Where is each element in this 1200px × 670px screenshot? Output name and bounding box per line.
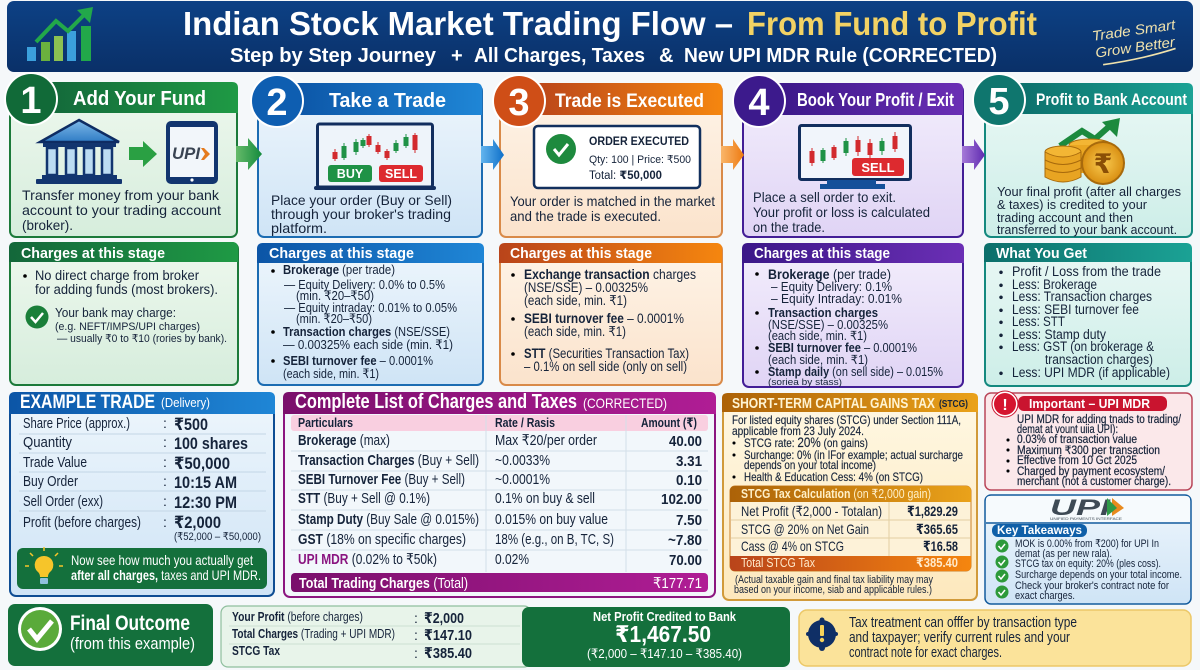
panel: profit summary — [221, 606, 531, 667]
step number 3: 3 — [508, 82, 530, 124]
heading: short-term capital gains tax: SHORT-TERM CAPITAL GAINS TAX — [732, 395, 935, 412]
panel: charges stage 2 — [257, 243, 484, 385]
text: step 4 description: Place a sell order to exit. — [753, 189, 896, 205]
text: stcg rules: For listed equity shares (STCG) under Section 111A, — [732, 413, 961, 427]
table: charges: 0.10 — [676, 472, 702, 489]
list: what you get — [999, 264, 1170, 380]
panel: net profit credited to bank — [522, 607, 790, 667]
panel: important upi mdr — [985, 391, 1192, 490]
arrow: step 4 to step 5 — [962, 139, 985, 170]
table: example trade rows: : — [163, 514, 167, 530]
text: stcg rules: depends on your total income) — [744, 458, 876, 472]
table: example trade rows: Share Price (approx.) — [23, 415, 130, 432]
list: stage 4 charges: – Equity Intraday: 0.01% — [771, 292, 902, 306]
icon: upi logo: UNIFIED PAYMENTS INTERFACE — [1050, 516, 1122, 521]
table: charges: ~0.0033% — [495, 452, 550, 469]
table: charges: UPI MDR (0.02% to ₹50k) — [298, 551, 437, 568]
icon: bank — [36, 120, 122, 184]
subtitle: New UPI MDR Rule (CORRECTED) — [684, 45, 997, 67]
heading: charges at this stage: Charges at this stage — [21, 245, 165, 262]
icon: upi logo: UPI — [1050, 495, 1111, 520]
text: stcg rules: Surchange: 0% (in IFor example; actual surcharge — [744, 448, 963, 462]
icon: coins and rising arrow: ₹ — [1094, 149, 1112, 179]
note: actual taxable gain — [734, 574, 933, 596]
panel: profit summary: : — [414, 610, 418, 626]
list: stage 2 charges: — Equity Delivery: 0.0% to 0.5% — [284, 277, 445, 292]
icon: trading monitor with buy and sell — [314, 124, 436, 190]
icon: exclamation: ! — [1002, 397, 1008, 414]
panel: profit summary: ₹2,000 — [424, 610, 464, 627]
subtitle: & — [659, 45, 673, 67]
panel: profit summary: ₹147.10 — [424, 627, 472, 644]
table: stcg tax calculation: ₹1,829.29 — [907, 503, 958, 519]
table: stcg tax calculation: STCG @ 20% on Net Gain — [741, 521, 869, 537]
table: example trade rows: 10:15 AM — [174, 473, 237, 492]
icons: green check marks — [996, 540, 1008, 598]
panel: final outcome — [8, 604, 213, 666]
panel: profit summary: STCG Tax — [232, 643, 281, 658]
panel: step 2 take a trade — [250, 74, 482, 237]
table: example trade rows: : — [163, 415, 167, 431]
table: stcg tax calculation: Cass @ 4% on STCG — [741, 538, 844, 554]
table: example trade rows: (₹52,000 – ₹50,000) — [174, 531, 261, 543]
panel: net profit credited to bank: ₹1,467.50 — [615, 621, 711, 647]
panel: charges stage 1 — [9, 242, 238, 385]
text: step 3 description: and the trade is executed. — [510, 208, 661, 224]
panel: step 5 profit to bank — [972, 73, 1193, 237]
text: step 3 description: Your order is matched in the market — [510, 193, 715, 209]
text: upi mdr rules — [1006, 414, 1182, 488]
list: stage 2 charges: Brokerage (per trade) — [283, 262, 395, 277]
subheading: from this example: (from this example) — [70, 634, 195, 653]
list: stage 2 charges: (min. ₹20–₹50) — [296, 288, 374, 303]
list: what you get: Less: UPI MDR (if applicable) — [1012, 365, 1170, 380]
table: charges: Transaction Charges (Buy + Sell) — [298, 452, 479, 469]
icon: tablet with UPI: UPI — [172, 144, 201, 163]
icon: exclamation — [992, 391, 1018, 417]
text: tax treatment note: contract note for exact charges. — [849, 644, 1002, 661]
icon: check — [26, 306, 48, 328]
table: charges: 0.02% — [495, 551, 529, 568]
list: stage 4 charges: (soriea by stass) — [768, 377, 842, 387]
table: charges: SEBI Turnover Fee (Buy + Sell) — [298, 471, 465, 488]
text: step 1 description: account to your trading account — [22, 202, 221, 218]
list: stage 2 charges: SEBI turnover fee – 0.0001% — [283, 353, 433, 368]
heading: complete list: Complete List of Charges and Taxes — [295, 391, 577, 413]
text: stcg rules: Health & Education Cess: 4% (on STCG) — [744, 470, 923, 484]
note: bank may charge: Your bank may charge: — [55, 306, 176, 320]
icon: light bulb — [25, 547, 63, 584]
table: example trade rows: Sell Order (exx) — [23, 493, 103, 510]
table: example trade rows: : — [163, 473, 167, 489]
icon: green check — [546, 134, 576, 164]
heading: take a trade: Take a Trade — [329, 90, 446, 112]
text: upi mdr rules: Charged by payment ecosystem/ — [1017, 466, 1166, 478]
step number 2 — [250, 74, 304, 128]
list: what you get: Profit / Loss from the trade — [1012, 264, 1161, 279]
list: stage 1 charges: for adding funds (most brokers). — [35, 282, 218, 297]
table: charges: GST (18% on specific charges) — [298, 531, 466, 548]
table: example trade rows: ₹50,000 — [174, 454, 230, 473]
list: stage 4 charges: Brokerage (per trade) — [768, 267, 891, 282]
panel: step 3 trade is executed — [492, 74, 722, 237]
panel: net profit credited to bank: (₹2,000 – ₹147.10 – ₹385.40) — [587, 646, 742, 661]
list: stage 3 charges: – 0.1% on sell side (only on sell) — [524, 359, 687, 374]
panel: profit summary: ₹385.40 — [424, 645, 472, 662]
heading: trade is executed: Trade is Executed — [555, 91, 704, 112]
table: charges: 3.31 — [676, 453, 702, 470]
callout: now see how much — [17, 547, 267, 589]
table: charges: Particulars — [298, 415, 353, 430]
text: step 5 description — [997, 184, 1181, 237]
step number 1 — [4, 72, 58, 126]
text: step 5 description: & taxes) is credited to your — [997, 197, 1148, 212]
table: charges: STT (Buy + Sell @ 0.1%) — [298, 490, 430, 507]
text: tax treatment note: Tax treatment can offfer by transaction type — [849, 614, 1077, 631]
title: From Fund to Profit — [747, 5, 1037, 42]
icon: green arrow — [129, 141, 157, 167]
list: key takeaways: STCG tax on equity: 20% (ples coss). — [1015, 558, 1161, 570]
table: example trade rows: : — [163, 493, 167, 509]
total row: Total Trading Charges (Total) — [299, 575, 468, 592]
total row — [291, 573, 708, 592]
panel: tax treatment note — [799, 610, 1191, 666]
step number 5: 5 — [988, 81, 1010, 123]
arrow: step 1 to step 2 — [236, 138, 262, 170]
card: order executed — [534, 126, 700, 188]
list: stage 4 charges: (each side, min. ₹1) — [768, 329, 867, 343]
list: stage 2 charges: — 0.00325% each side (min. ₹1) — [283, 337, 453, 352]
list: key takeaways: Check your broker's contract note for — [1015, 580, 1169, 592]
list: what you get: Less: Brokerage — [1012, 277, 1097, 292]
list: stage 3 charges: STT (Securities Transaction Tax) — [524, 346, 689, 361]
text: step 4 description: on the trade. — [753, 219, 825, 235]
list: stage 2 charges — [271, 262, 457, 381]
table: example trade rows: ₹500 — [174, 415, 208, 434]
table: example trade rows: : — [163, 434, 167, 450]
total row: ₹177.71 — [653, 575, 702, 592]
icon: warning badge — [806, 618, 838, 651]
list: what you get: Less: SEBI turnover fee — [1012, 302, 1139, 317]
table: charges: Max ₹20/per order — [495, 432, 597, 449]
text: step 3 description — [510, 193, 715, 224]
panel: charges stage 4 — [742, 243, 964, 387]
table: stcg tax calculation: ₹365.65 — [916, 521, 958, 537]
note: actual taxable gain: based on your income, siab and applicable rules.) — [734, 584, 932, 596]
list: stage 3 charges — [511, 267, 696, 374]
list: stage 3 charges: (NSE/SSE) – 0.00325% — [524, 280, 648, 295]
panel: example trade — [9, 392, 275, 596]
panel: net profit credited to bank: Net Profit Credited to Bank — [593, 609, 737, 624]
text: step 2 description — [271, 192, 452, 236]
heading: final outcome: Final Outcome — [70, 612, 190, 635]
title: Indian Stock Market Trading Flow – — [183, 5, 733, 42]
subheading: delivery: (Delivery) — [161, 395, 210, 410]
text: step 5 description: Your final profit (after all charges — [997, 184, 1181, 199]
step number 5 — [972, 73, 1026, 127]
arrow: step 3 to step 4 — [721, 139, 744, 170]
list: stage 4 charges: (each side, min. ₹1) — [768, 353, 868, 367]
text: step 4 description: Your profit or loss is calculated — [753, 204, 930, 220]
icon: large check — [18, 607, 62, 651]
table: stcg tax calculation: Total STCG Tax — [741, 555, 815, 570]
table: example trade rows: Buy Order — [23, 473, 78, 490]
callout: now see how much: after all charges, taxes and UPI MDR. — [71, 567, 261, 583]
table: charges: Stamp Duty (Buy Sale @ 0.015%) — [298, 511, 479, 528]
slogan: Trade Smart Grow Better: Grow Better — [1094, 33, 1177, 61]
title — [183, 5, 1037, 42]
list: stage 4 charges: Stamp daily (on sell side) – 0.015% — [768, 365, 943, 379]
subtitle: Step by Step Journey — [230, 45, 437, 67]
pill heading: important upi mdr: Important – UPI MDR — [1029, 397, 1150, 411]
panel: step 1 add your fund — [4, 72, 238, 237]
table: charges: 0.015% on buy value — [495, 511, 608, 528]
icon: upi logo — [1050, 495, 1124, 521]
step number 4 — [732, 74, 786, 128]
table: stcg tax calculation: Net Profit (₹2,000 - Totalan) — [741, 503, 882, 519]
panel: step 4 book your profit — [732, 74, 963, 237]
text: upi mdr rules: Maximum ₹300 per transaction — [1017, 445, 1160, 457]
list: what you get: Less: Stamp duty — [1012, 327, 1106, 342]
card: order executed: Total: ₹50,000 — [589, 170, 662, 182]
table: example trade rows — [19, 415, 266, 543]
heading: book your profit / exit: Book Your Profit / Exit — [797, 90, 954, 110]
card: order executed: Qty: 100 | Price: ₹500 — [589, 154, 691, 166]
text: upi mdr rules: demat at vount uiia UPI): — [1017, 424, 1118, 436]
list: key takeaways: demat (as per new rala). — [1015, 548, 1112, 560]
table: charges: Amount (₹) — [641, 415, 697, 430]
subheading: corrected: (CORRECTED) — [583, 395, 667, 411]
list: stage 4 charges — [755, 267, 943, 387]
step number 4: 4 — [748, 82, 770, 124]
table: charges: 102.00 — [661, 491, 702, 508]
table: example trade rows: ₹2,000 — [174, 513, 221, 532]
list: what you get: transaction charges) — [1045, 352, 1153, 367]
list: stage 4 charges: – Equity Delivery: 0.1% — [771, 280, 892, 294]
text: upi mdr rules: Effective from 10 Gct 2025 — [1017, 455, 1137, 467]
text: upi mdr rules: merchant (not a customer charge). — [1017, 476, 1171, 488]
heading: example trade: EXAMPLE TRADE — [20, 392, 155, 413]
panel: complete list of charges and taxes — [283, 391, 716, 597]
list: what you get: Less: Transaction charges — [1012, 289, 1152, 304]
heading: charges at this stage: Charges at this stage — [269, 245, 414, 262]
list: stage 1 charges: No direct charge from broker — [35, 268, 199, 283]
step number 1: 1 — [20, 80, 42, 122]
text: tax treatment note — [849, 614, 1077, 661]
table: stcg tax calculation — [730, 486, 971, 571]
icon: monitor with sell — [800, 126, 910, 189]
table: charges: ~7.80 — [668, 532, 702, 549]
table: example trade rows: : — [163, 454, 167, 470]
icon: trading monitor with buy and sell: BUY — [337, 167, 364, 181]
panel: profit summary: Total Charges (Trading + UPI MDR) — [232, 626, 395, 641]
table: stcg tax calculation: ₹385.40 — [916, 555, 958, 570]
list: key takeaways — [1015, 538, 1182, 602]
heading: charges at this stage: Charges at this stage — [754, 245, 890, 262]
subtitle — [230, 45, 997, 67]
table: charges: 70.00 — [669, 552, 702, 569]
text: step 2 description: platform. — [271, 220, 327, 236]
table: stcg tax calculation: STCG Tax Calculation (on ₹2,000 gain) — [741, 487, 931, 501]
text: step 2 description: Place your order (Buy or Sell) — [271, 192, 452, 208]
list: stage 2 charges: Transaction charges (NSE/SSE) — [283, 324, 450, 339]
slogan: Trade Smart Grow Better: Trade Smart — [1091, 16, 1178, 44]
table: example trade rows: Quantity — [23, 434, 72, 451]
icon: coins and rising arrow — [1045, 118, 1124, 184]
text: stcg rules — [732, 413, 963, 484]
list: stage 1 charges — [23, 268, 218, 297]
text: step 1 description: (broker). — [22, 217, 73, 233]
list: key takeaways: exact charges. — [1015, 590, 1075, 602]
icon: monitor with sell: SELL — [861, 160, 895, 175]
list: key takeaways: MOK is 0.00% from ₹200) for UPI In — [1015, 538, 1159, 550]
subheading: stcg: (STCG) — [939, 399, 968, 410]
text: step 1 description: Transfer money from your bank — [22, 187, 220, 203]
heading: what you get: What You Get — [996, 245, 1087, 262]
heading: charges at this stage: Charges at this stage — [510, 245, 652, 262]
text: tax treatment note: and taxpayer; verify current rules and your — [849, 629, 1070, 646]
text: step 5 description: trading account and then — [997, 210, 1133, 225]
list: stage 2 charges: — Equity intraday: 0.01% to 0.05% — [284, 300, 457, 315]
text: stcg rules: applicable from 23 July 2024. — [732, 424, 864, 438]
note: bank may charge: (e.g. NEFT/IMPS/UPI charges) — [55, 321, 200, 333]
card: order executed: ORDER EXECUTED — [589, 134, 689, 148]
heading: add your fund: Add Your Fund — [73, 88, 206, 110]
table: example trade rows: 12:30 PM — [174, 493, 237, 512]
icon: trading monitor with buy and sell: SELL — [385, 167, 417, 181]
list: what you get: Less: GST (on brokerage & — [1012, 339, 1154, 354]
text: step 2 description: through your broker's trading — [271, 206, 451, 222]
list: stage 2 charges: (min. ₹20–₹50) — [296, 311, 372, 326]
subtitle: + — [451, 45, 463, 67]
text: stcg rules: STCG rate: 20% (on gains) — [744, 434, 868, 450]
list: stage 3 charges: SEBI turnover fee – 0.0001% — [524, 311, 684, 326]
panel: upi logo and key takeaways — [985, 495, 1191, 604]
panel: profit summary: Your Profit (before charges) — [232, 609, 363, 624]
list: stage 3 charges: Exchange transaction charges — [524, 267, 696, 282]
text: step 1 description — [22, 187, 221, 233]
list: stage 4 charges: SEBI turnover fee – 0.0001% — [768, 341, 917, 355]
note: bank may charge: — usually ₹0 to ₹10 (rories by bank). — [57, 333, 227, 345]
table: example trade rows: Trade Value — [23, 454, 87, 471]
table: charges — [291, 415, 708, 572]
table: charges: ~0.0001% — [495, 471, 550, 488]
icon: tablet with UPI — [166, 121, 218, 184]
table: charges: 0.1% on buy & sell — [495, 490, 595, 507]
subtitle: All Charges, Taxes — [474, 45, 645, 67]
panel: what you get — [984, 243, 1192, 386]
table: charges: Brokerage (max) — [298, 432, 390, 449]
panel: short-term capital gains tax — [722, 393, 978, 600]
arrow: step 2 to step 3 — [481, 139, 504, 170]
panel: profit summary: : — [414, 627, 418, 643]
panel: charges stage 3 — [499, 243, 722, 385]
text: step 5 description: transferred to your bank account. — [997, 222, 1177, 237]
table: example trade rows: 100 shares — [174, 434, 248, 453]
note: bank may charge — [55, 306, 227, 345]
text: upi mdr rules: 0.03% of transaction value — [1017, 434, 1137, 446]
pill heading: key takeaways: Key Takeaways — [997, 523, 1082, 537]
list: stage 3 charges: (each side, min. ₹1) — [524, 324, 626, 339]
table: charges: 7.50 — [676, 512, 702, 529]
text: step 4 description — [753, 189, 930, 235]
table: charges: 18% (e.g., on B, TC, S) — [495, 531, 614, 548]
table: example trade rows: Profit (before charges) — [23, 514, 141, 531]
table: stcg tax calculation: ₹16.58 — [923, 538, 958, 554]
list: stage 2 charges: (each side, min. ₹1) — [283, 366, 379, 381]
step number 2: 2 — [266, 82, 288, 124]
list: stage 3 charges: (each side, min. ₹1) — [524, 293, 627, 308]
header banner — [7, 1, 1193, 72]
table: charges: Rate / Rasis — [495, 415, 555, 430]
panel: profit summary: : — [414, 645, 418, 661]
step number 3 — [492, 74, 546, 128]
note: actual taxable gain: (Actual taxable gain and final tax liability may may — [735, 574, 933, 586]
table: charges: 40.00 — [669, 433, 702, 450]
icon: rising bar chart logo — [27, 7, 93, 61]
callout: now see how much: Now see how much you actually get — [71, 552, 253, 568]
slogan: Trade Smart Grow Better — [1091, 16, 1181, 66]
list: stage 4 charges: Transaction charges — [768, 306, 878, 320]
list: what you get: Less: STT — [1012, 314, 1065, 329]
text: upi mdr rules: UPI MDR for adding tnads to trading/ — [1017, 414, 1182, 426]
list: stage 4 charges: (NSE/SSE) – 0.00325% — [768, 318, 888, 332]
